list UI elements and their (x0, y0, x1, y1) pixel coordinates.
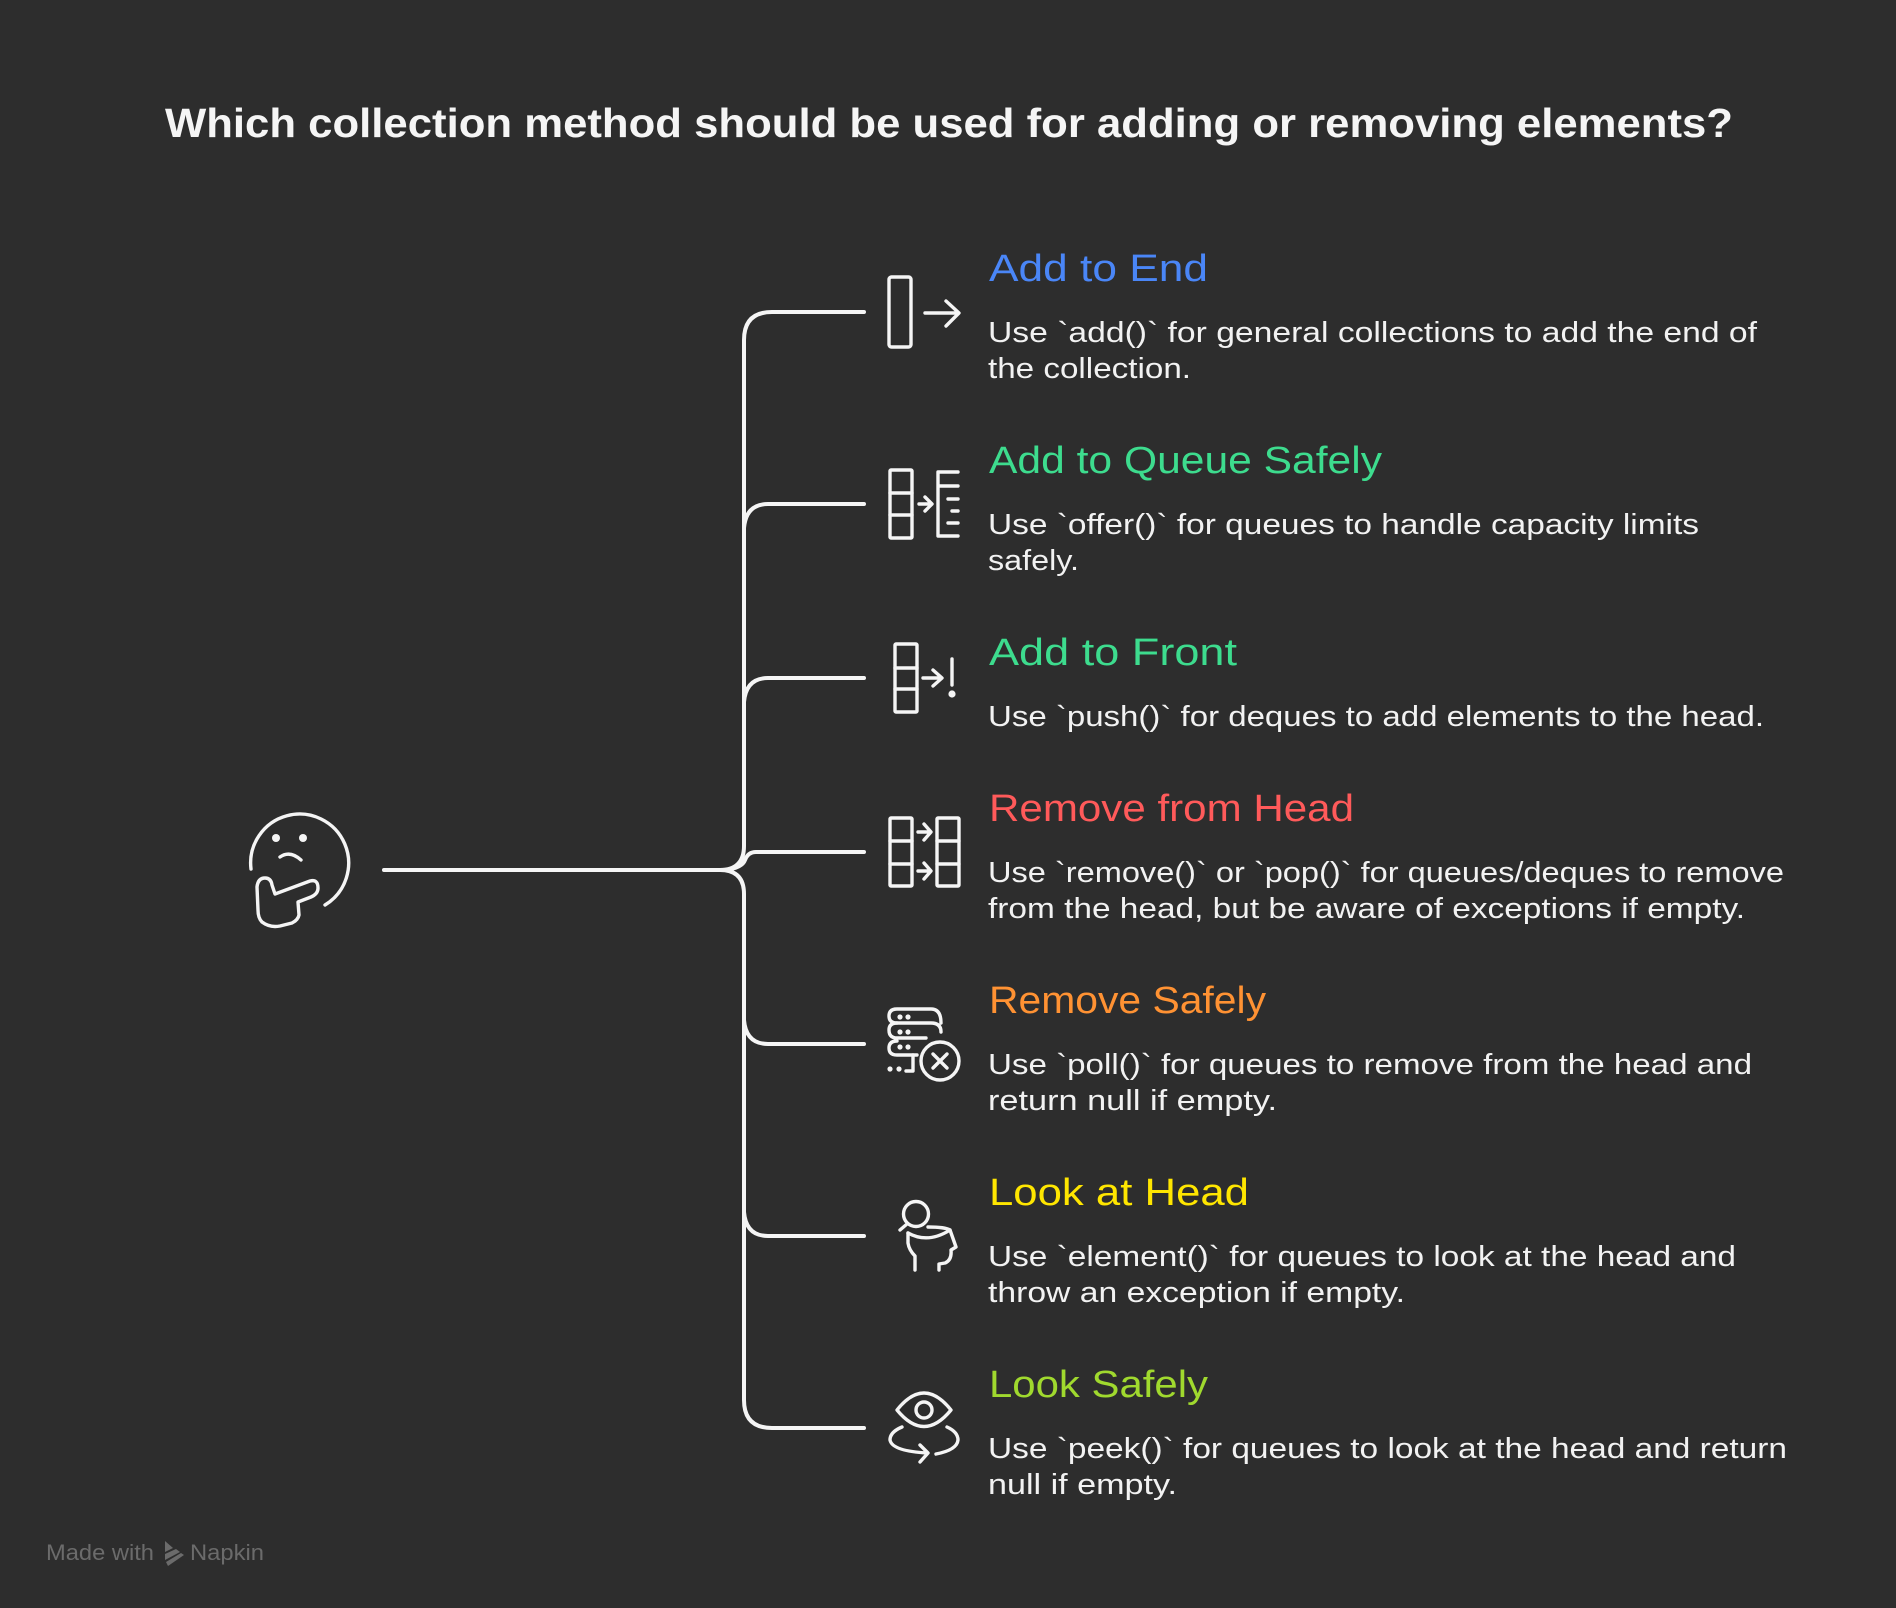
item: Add to Queue Safely (890, 440, 1699, 577)
icon: add to front (895, 644, 956, 712)
description: Remove from Head: from the head, but be aware of exceptions if empty. (988, 893, 1745, 925)
icon: look at head (900, 1202, 956, 1270)
heading: Add to End: Add to End (989, 248, 1208, 290)
description: Add to Front: Use `push()` for deques to add elements to the head. (988, 701, 1764, 733)
description: Add to End: the collection. (988, 353, 1191, 385)
description: Add to Queue Safely: safely. (988, 545, 1079, 577)
description: Look at Head: throw an exception if empty. (988, 1277, 1405, 1309)
item: Look Safely (890, 1364, 1787, 1501)
heading: Add to Front: Add to Front (989, 632, 1238, 674)
item: Add to End (889, 248, 1758, 385)
item: Remove from Head (890, 788, 1784, 925)
icon: thinking face (251, 814, 349, 926)
connector tree (384, 312, 864, 1428)
footer: made with Napkin: Made with (46, 1540, 154, 1565)
item: Remove Safely (887, 980, 1752, 1117)
icon: look safely (890, 1393, 958, 1462)
title: Which collection method should be used for adding or removing elements? (165, 100, 1733, 146)
description: Remove Safely: return null if empty. (988, 1085, 1277, 1117)
heading: Look Safely: Look Safely (989, 1364, 1208, 1406)
icon: Napkin logo (165, 1541, 184, 1566)
description: Remove from Head: Use `remove()` or `pop()` for queues/deques to remove (988, 857, 1784, 889)
item: Look at Head (900, 1172, 1736, 1309)
footer: made with Napkin (46, 1540, 264, 1566)
footer: made with Napkin: Napkin (190, 1540, 264, 1565)
description: Add to Queue Safely: Use `offer()` for queues to handle capacity limits (988, 509, 1699, 541)
item: Add to Front (895, 632, 1764, 733)
icon: remove safely (887, 1009, 959, 1080)
icon: add to end (889, 277, 959, 347)
description: Look Safely: Use `peek()` for queues to look at the head and return (988, 1433, 1787, 1465)
heading: Add to Queue Safely: Add to Queue Safely (989, 440, 1382, 482)
description: Look Safely: null if empty. (988, 1469, 1177, 1501)
heading: Remove from Head: Remove from Head (989, 788, 1354, 830)
description: Remove Safely: Use `poll()` for queues to remove from the head and (988, 1049, 1752, 1081)
heading: Remove Safely: Remove Safely (989, 980, 1266, 1022)
icon: add to queue (890, 470, 958, 538)
heading: Look at Head: Look at Head (989, 1172, 1249, 1214)
icon: remove from head (890, 818, 959, 886)
description: Add to End: Use `add()` for general collections to add the end of (988, 317, 1758, 349)
description: Look at Head: Use `element()` for queues to look at the head and (988, 1241, 1736, 1273)
